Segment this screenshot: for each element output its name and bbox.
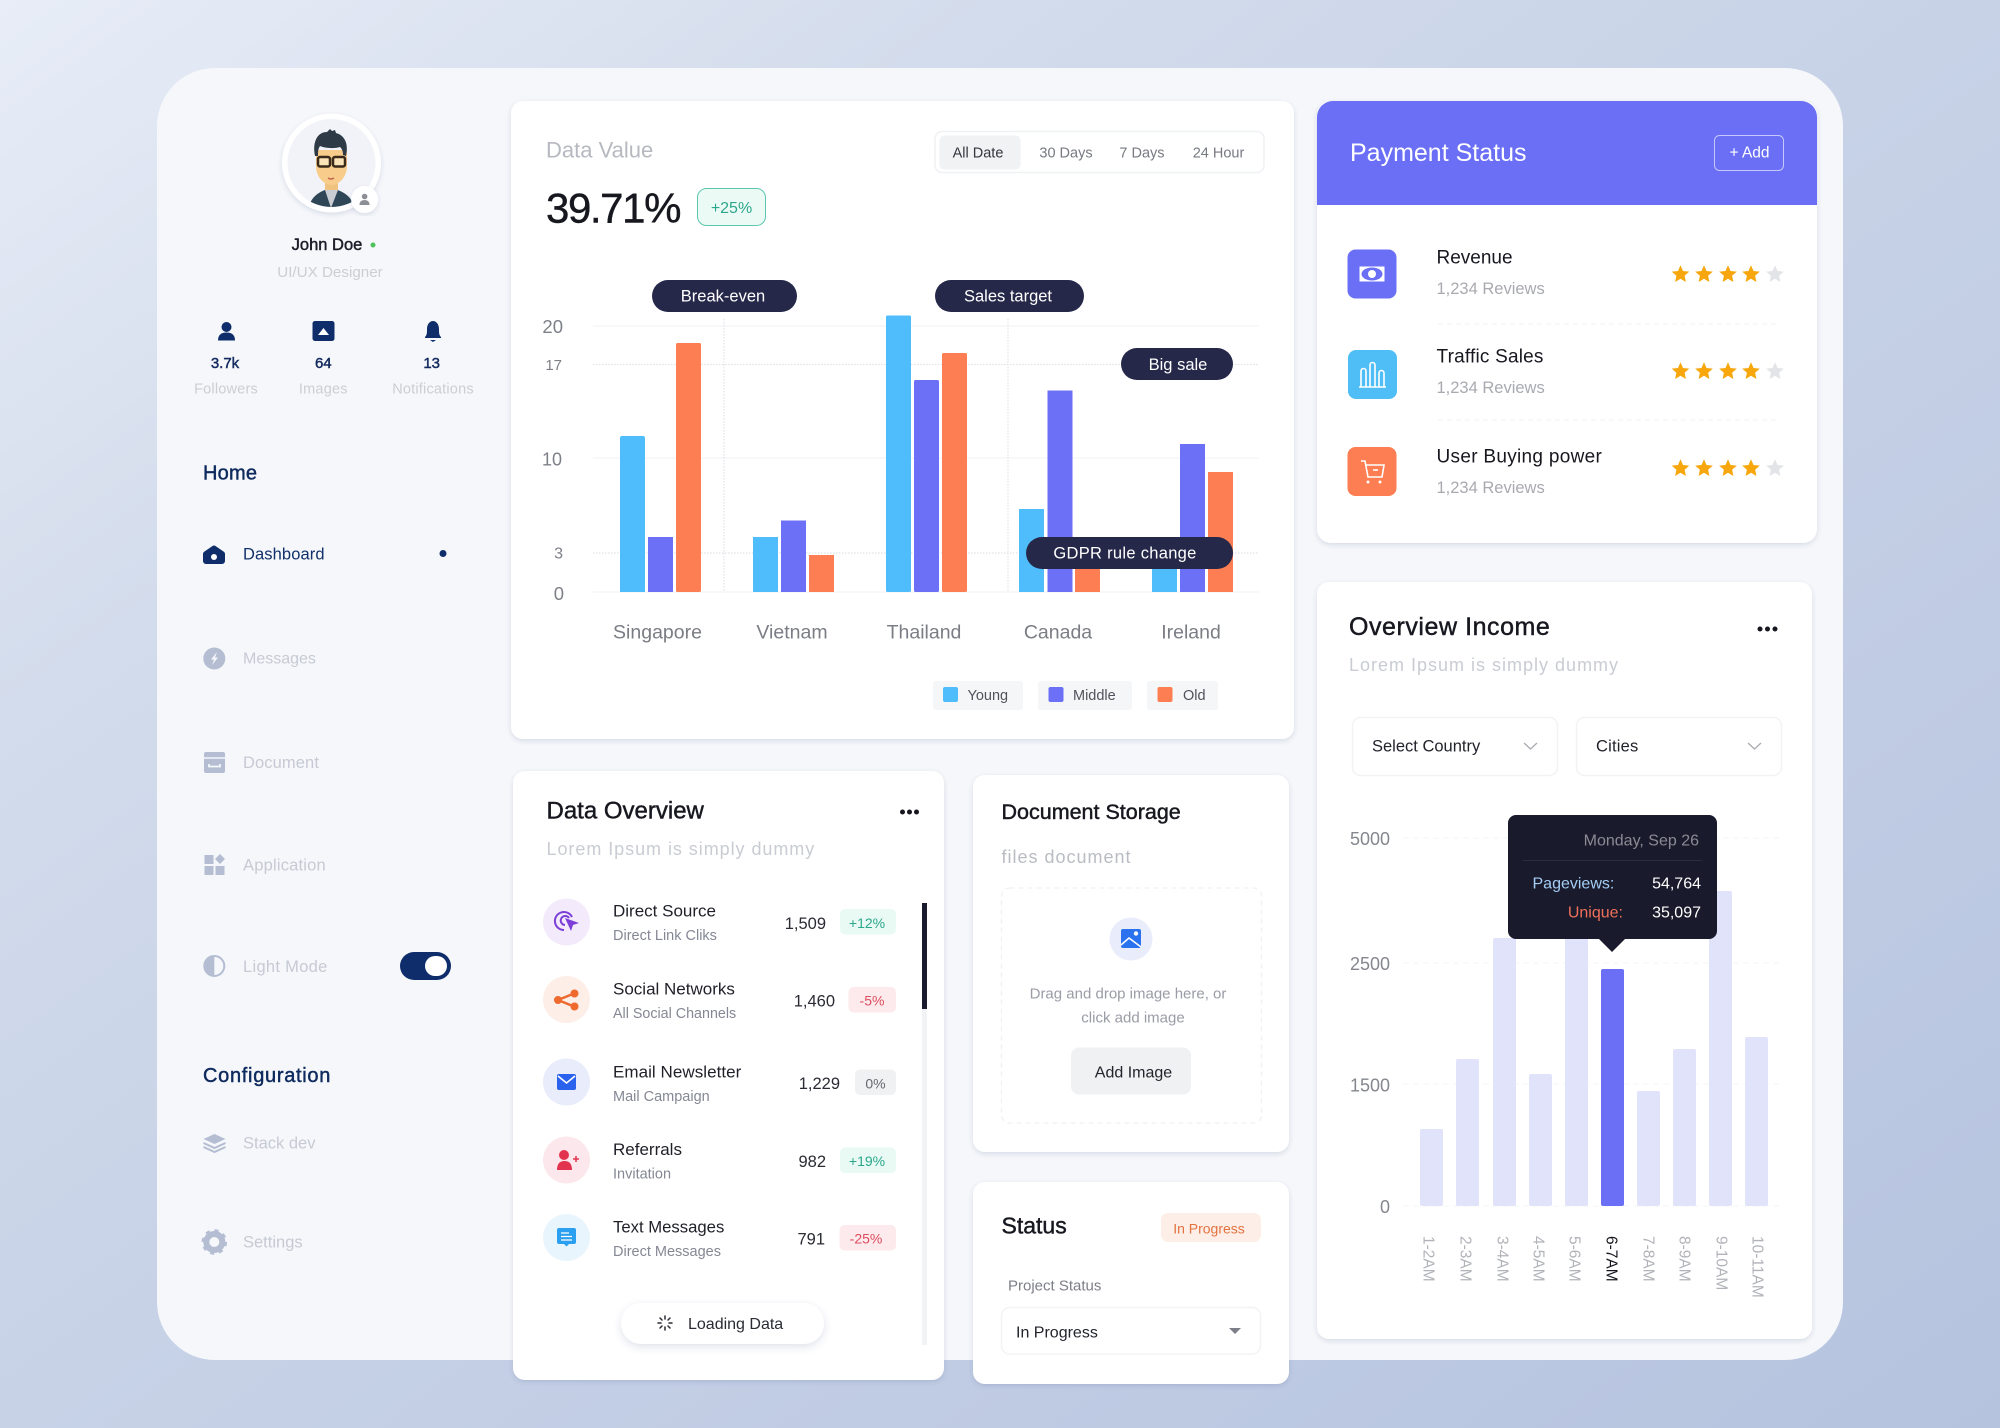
add image button: Add Image <box>1095 1064 1172 1081</box>
tooltip: Pageviews: <box>1532 875 1614 892</box>
row: referrals: Invitation <box>613 1166 671 1182</box>
panel: overview income <box>1317 582 1812 1339</box>
y axis labels: 1500 <box>1350 1075 1390 1095</box>
x axis labels: Vietnam <box>756 621 828 643</box>
panel: document storage <box>973 775 1289 1152</box>
stat: images: Images <box>299 381 348 397</box>
annotation: gdpr rule change: GDPR rule change <box>1053 544 1197 562</box>
bars: vietnam <box>753 520 834 592</box>
payment header: + Add <box>1729 144 1770 161</box>
change badge <box>698 188 766 226</box>
dropdown: select country <box>1352 718 1558 776</box>
stat: notifications <box>392 321 474 397</box>
heading: overview income: Overview Income <box>1349 613 1550 641</box>
payment header <box>1317 101 1817 205</box>
x axis labels: 2-3AM <box>1456 1236 1474 1282</box>
tooltip: Unique: <box>1568 904 1623 921</box>
bars: canada <box>1019 390 1100 592</box>
x axis labels: Thailand <box>887 621 961 643</box>
drop zone instructions: click add image <box>1081 1009 1185 1026</box>
date range tabs <box>935 132 1264 172</box>
x axis labels: Canada <box>1024 621 1092 643</box>
stat: images: 64 <box>315 355 332 372</box>
in progress badge: In Progress <box>1173 1220 1245 1236</box>
bars: ireland <box>1152 444 1233 592</box>
status select <box>1002 1308 1260 1354</box>
row: traffic sales: Traffic Sales <box>1436 346 1544 367</box>
row: revenue: Revenue <box>1436 247 1513 268</box>
annotation: sales target: Sales target <box>964 287 1052 305</box>
tooltip: Monday, Sep 26 <box>1584 832 1699 849</box>
row: referrals: Referrals <box>613 1140 682 1159</box>
annotation: break-even: Break-even <box>681 287 765 305</box>
row: direct source: Direct Source <box>613 901 716 920</box>
row: text messages: Direct Messages <box>613 1244 721 1260</box>
tooltip: 54,764 <box>1652 875 1701 892</box>
legend <box>933 681 1218 710</box>
main dashboard panel <box>157 68 1843 1360</box>
row: user buying power <box>1348 446 1784 497</box>
row: email newsletter <box>543 1058 896 1106</box>
row: revenue: 1,234 Reviews <box>1436 280 1545 298</box>
bar chart <box>542 280 1259 643</box>
row: referrals: +19% <box>849 1153 885 1169</box>
row: social networks <box>543 976 896 1023</box>
y axis labels: 20 <box>542 316 563 337</box>
payment header: Payment Status <box>1350 139 1526 167</box>
row: email newsletter: 0% <box>865 1075 886 1091</box>
annotation: big sale <box>1121 348 1233 380</box>
stat: images <box>299 321 348 397</box>
stat: notifications: Notifications <box>392 381 474 397</box>
y axis labels: 0 <box>1380 1197 1390 1217</box>
row: direct source <box>543 898 896 946</box>
row: referrals <box>543 1136 896 1184</box>
x axis labels: 4-5AM <box>1530 1236 1546 1282</box>
row: social networks: 1,460 <box>794 992 835 1010</box>
y axis labels: 10 <box>542 449 562 469</box>
subtitle: Lorem Ipsum is simply dummy <box>546 839 815 859</box>
row: direct source: 1,509 <box>785 915 826 933</box>
date range tabs: 7 Days <box>1119 145 1165 161</box>
row: social networks: Social Networks <box>613 979 735 998</box>
annotation: break-even <box>652 280 797 312</box>
scrollbar <box>922 903 927 1345</box>
menu: messages <box>203 648 316 670</box>
user name: John Doe <box>292 236 362 254</box>
more menu dots <box>900 810 919 814</box>
x axis labels: 3-4AM <box>1494 1236 1510 1282</box>
row: social networks: -5% <box>860 992 884 1008</box>
row: user buying power: User Buying power <box>1436 446 1602 467</box>
panel: data overview <box>513 771 944 1380</box>
menu: application <box>204 854 326 875</box>
change badge: +25% <box>711 200 752 217</box>
legend: Middle <box>1073 688 1116 704</box>
heading: status: Status <box>1002 1212 1067 1238</box>
row: email newsletter: Email Newsletter <box>613 1062 742 1081</box>
menu: settings: Settings <box>243 1233 303 1251</box>
profile avatar <box>282 114 381 213</box>
status dot <box>370 242 376 248</box>
panel: payment status <box>1317 101 1817 543</box>
menu: dashboard: Dashboard <box>243 545 325 563</box>
x axis labels: 7-8AM <box>1640 1236 1656 1282</box>
y axis labels: 2500 <box>1350 954 1390 974</box>
x axis labels: 10-11AM <box>1748 1236 1766 1298</box>
panel: data value chart <box>511 101 1294 739</box>
menu: stack dev <box>204 1134 316 1152</box>
x axis labels: 6-7AM <box>1602 1236 1620 1282</box>
menu: light mode <box>204 956 328 976</box>
drop zone instructions: Drag and drop image here, or <box>1030 985 1226 1002</box>
project status label: Project Status <box>1008 1277 1101 1294</box>
tooltip: 35,097 <box>1652 904 1701 921</box>
stat: notifications: 13 <box>423 355 440 372</box>
row: direct source: Direct Link Cliks <box>613 928 717 944</box>
heading: configuration: Configuration <box>203 1065 331 1087</box>
dropdown: select country: Select Country <box>1372 737 1481 755</box>
menu: messages: Messages <box>243 650 316 667</box>
x axis labels: Ireland <box>1161 621 1221 643</box>
x axis labels: 5-6AM <box>1566 1236 1582 1282</box>
menu: dashboard <box>203 545 446 564</box>
sidebar <box>194 114 474 1253</box>
annotation: big sale: Big sale <box>1149 356 1207 374</box>
x axis labels <box>613 621 1221 643</box>
legend: Old <box>1183 688 1206 704</box>
x axis labels: Singapore <box>613 621 702 643</box>
tooltip <box>1508 815 1717 952</box>
big value: 39.71% <box>546 184 680 231</box>
drop zone <box>1002 888 1262 1123</box>
menu: settings <box>203 1231 303 1253</box>
user role: UI/UX Designer <box>277 264 383 281</box>
drop zone instructions <box>1030 985 1226 1026</box>
row: social networks: All Social Channels <box>613 1006 736 1022</box>
x axis labels: 8-9AM <box>1676 1236 1692 1282</box>
toggle switch <box>400 952 451 980</box>
loading data button: Loading Data <box>688 1316 783 1333</box>
y axis labels <box>1350 829 1390 1217</box>
bars: singapore <box>620 343 701 592</box>
label: data value: Data Value <box>546 137 653 162</box>
subtitle: Lorem Ipsum is simply dummy <box>1349 655 1619 675</box>
stat: followers <box>194 322 258 397</box>
status select: In Progress <box>1016 1324 1098 1341</box>
heading: document storage: Document Storage <box>1002 800 1181 824</box>
add image button <box>1071 1048 1191 1094</box>
heading: home: Home <box>203 462 257 484</box>
y axis labels <box>542 316 564 604</box>
row: traffic sales <box>1348 346 1784 399</box>
row: revenue <box>1348 247 1784 298</box>
annotation: sales target <box>935 280 1084 312</box>
y axis labels: 17 <box>545 357 562 374</box>
row: direct source: +12% <box>849 915 885 931</box>
row: text messages: Text Messages <box>613 1217 724 1236</box>
annotation: gdpr rule change <box>1026 537 1233 569</box>
date range tabs: All Date <box>953 145 1003 161</box>
income bar chart <box>1350 815 1782 1298</box>
x axis labels: 9-10AM <box>1712 1236 1730 1290</box>
row: text messages <box>543 1214 896 1261</box>
x axis labels <box>1420 1236 1766 1298</box>
menu: document <box>204 752 319 773</box>
legend: Young <box>968 688 1008 704</box>
row: traffic sales: 1,234 Reviews <box>1436 379 1545 397</box>
dropdown: cities <box>1576 718 1782 776</box>
more menu dots <box>1758 626 1778 632</box>
menu: document: Document <box>243 754 319 772</box>
row: text messages: -25% <box>850 1230 882 1246</box>
row: email newsletter: 1,229 <box>799 1075 840 1093</box>
date range tabs: 24 Hour <box>1193 145 1244 161</box>
y axis labels: 5000 <box>1350 829 1390 849</box>
x axis labels: 1-2AM <box>1420 1236 1436 1282</box>
date range tabs: 30 Days <box>1039 145 1093 161</box>
menu: application: Application <box>243 856 326 874</box>
row: user buying power: 1,234 Reviews <box>1436 479 1545 497</box>
menu: stack dev: Stack dev <box>243 1134 316 1152</box>
icon: image upload <box>1110 918 1152 960</box>
y axis labels: 0 <box>554 583 564 604</box>
row: referrals: 982 <box>798 1153 826 1171</box>
row: email newsletter: Mail Campaign <box>613 1089 710 1105</box>
panel: status <box>973 1182 1289 1384</box>
loading data button <box>621 1303 824 1344</box>
y axis labels: 3 <box>554 545 563 562</box>
stat: followers: 3.7k <box>211 355 240 372</box>
bars <box>1420 891 1768 1206</box>
subtitle: files document <box>1002 847 1132 867</box>
dropdown: cities: Cities <box>1596 737 1638 755</box>
menu: light mode: Light Mode <box>243 958 328 976</box>
bars: thailand <box>886 316 967 592</box>
row: text messages: 791 <box>797 1230 825 1248</box>
stat: followers: Followers <box>194 381 258 397</box>
heading: data overview: Data Overview <box>546 797 705 824</box>
in progress badge <box>1161 1213 1261 1242</box>
